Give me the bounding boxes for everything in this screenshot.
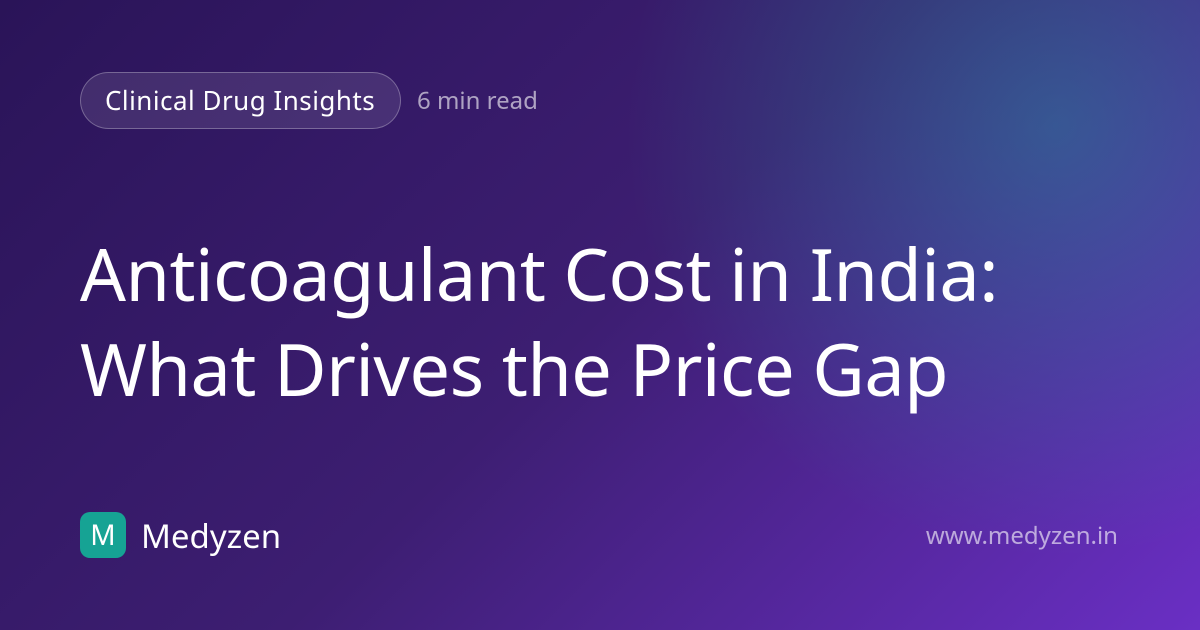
icon: Medyzen logo: M [90, 516, 116, 554]
pill label: Clinical Drug Insights [105, 82, 375, 118]
title [80, 225, 998, 418]
brand name: Medyzen [141, 513, 281, 558]
title: What Drives the Price Gap [80, 320, 948, 418]
read time: 6 min read [417, 84, 538, 117]
icon: Medyzen logo [80, 512, 126, 558]
title: Anticoagulant Cost in India: [80, 225, 998, 323]
website url: www.medyzen.in [926, 519, 1118, 552]
category pill [80, 72, 401, 129]
